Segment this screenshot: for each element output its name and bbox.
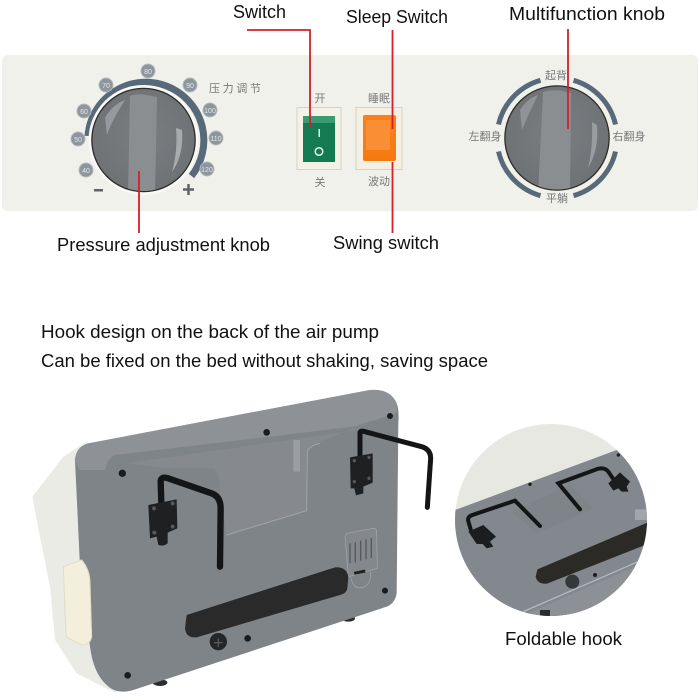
callout line: sleep switch [392, 30, 394, 129]
callout line: pressure adjustment knob [138, 171, 140, 233]
pump white side body [32, 442, 140, 693]
orange rocker switch [356, 92, 402, 188]
pressure adjustment knob with dial: 120 [201, 167, 213, 174]
lighter top bevel [75, 390, 397, 470]
orange rocker switch: 波动 [368, 175, 390, 188]
pressure adjustment knob with dial: 40 [82, 168, 90, 175]
callout line: swing switch [392, 162, 394, 233]
pressure adjustment knob with dial: 80 [144, 69, 152, 76]
pressure adjustment knob with dial: 90 [186, 83, 194, 90]
white side connector [63, 560, 92, 645]
pressure adjustment knob with dial: 70 [102, 83, 110, 90]
label: sleep switch: Sleep Switch [346, 7, 448, 27]
label: foldable hook: Foldable hook [505, 629, 623, 649]
multifunction knob with dial: 左翻身 [468, 129, 502, 143]
multifunction knob with dial: 右翻身 [612, 129, 646, 143]
inset foam bar [537, 523, 648, 583]
foam bar [185, 567, 348, 637]
label: swing switch: Swing switch [333, 233, 439, 253]
rubber feet [153, 615, 355, 686]
pressure adjustment knob with dial: 100 [204, 108, 216, 115]
battery door [345, 528, 377, 588]
left hook [148, 478, 221, 567]
label: switch: Switch [233, 2, 286, 22]
multifunction knob with dial: 起背 [545, 68, 567, 82]
green rocker switch: 开 [314, 93, 326, 105]
pressure adjustment knob with dial: 50 [74, 137, 82, 144]
inset screws [528, 453, 620, 589]
description text [41, 322, 488, 371]
green rocker switch: 关 [314, 175, 326, 189]
screw holes [119, 413, 393, 679]
panel: control panel [2, 55, 698, 211]
pressure adjustment knob with dial: 压力调节 [209, 82, 261, 95]
grey back shell [75, 390, 399, 692]
pressure adjustment knob with dial: 60 [80, 109, 88, 116]
pressure adjustment knob with dial [71, 64, 261, 195]
callout line: switch [247, 30, 310, 128]
pressure adjustment knob with dial: 110 [210, 136, 222, 143]
label: multifunction knob: Multifunction knob [509, 4, 665, 24]
recessed hook channel [127, 428, 358, 535]
circular detail inset: foldable hook [453, 423, 653, 620]
inset grey shell [453, 450, 653, 620]
air pump back view [32, 390, 431, 693]
large screw [210, 633, 227, 650]
label: pressure adjustment knob: Pressure adjustment knob [57, 235, 270, 255]
inset hooks [468, 468, 615, 529]
description text: Can be fixed on the bed without shaking, saving space [41, 351, 488, 371]
multifunction knob with dial: 平躺 [546, 191, 568, 205]
green rocker switch [297, 93, 341, 189]
description text: Hook design on the back of the air pump [41, 322, 379, 342]
multifunction knob with dial [468, 68, 646, 205]
orange rocker switch: 睡眠 [368, 92, 390, 105]
right hook [350, 431, 431, 507]
callout line: multifunction knob [567, 29, 569, 129]
